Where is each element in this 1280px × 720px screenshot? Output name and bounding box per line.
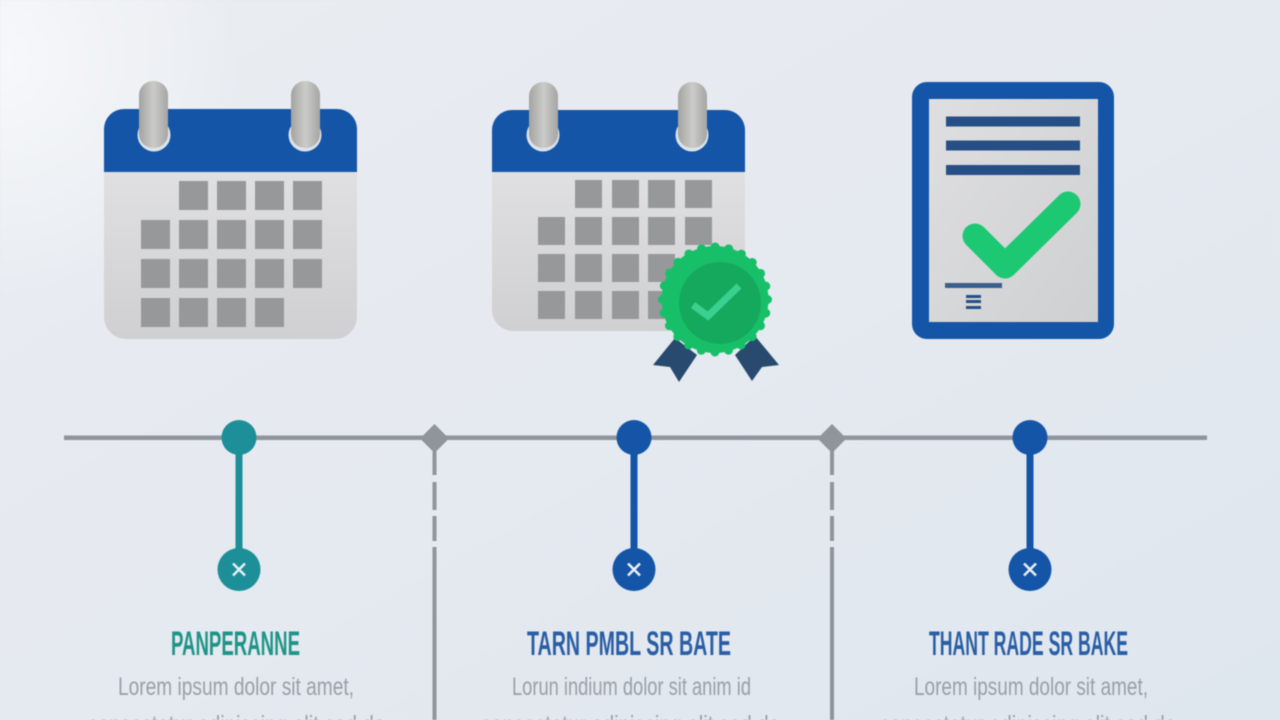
heading: step 2: TARN PMBL SR BATE [527, 625, 731, 663]
icon: award badge [653, 246, 779, 382]
text block: step 1 [88, 625, 385, 720]
divider: right [818, 424, 846, 720]
heading: step 1: PANPERANNE [171, 625, 300, 663]
icon: calendar [104, 81, 357, 339]
timeline axis [64, 436, 1207, 440]
icon: calendar with certified badge [492, 82, 779, 382]
marker: step 2 [612, 420, 656, 591]
divider: left [420, 424, 449, 720]
icon: approved document [912, 82, 1114, 339]
marker: step 3 [1008, 420, 1052, 591]
text block: step 1: Lorem ipsum dolor sit amet, [118, 673, 354, 701]
text block: step 3: Lorem ipsum dolor sit amet, [914, 673, 1148, 701]
text block: step 2 [481, 625, 780, 720]
text block: step 3 [880, 625, 1176, 720]
text block: step 2: Lorun indium dolor sit anim id [512, 673, 751, 701]
marker: step 1 [218, 420, 260, 591]
